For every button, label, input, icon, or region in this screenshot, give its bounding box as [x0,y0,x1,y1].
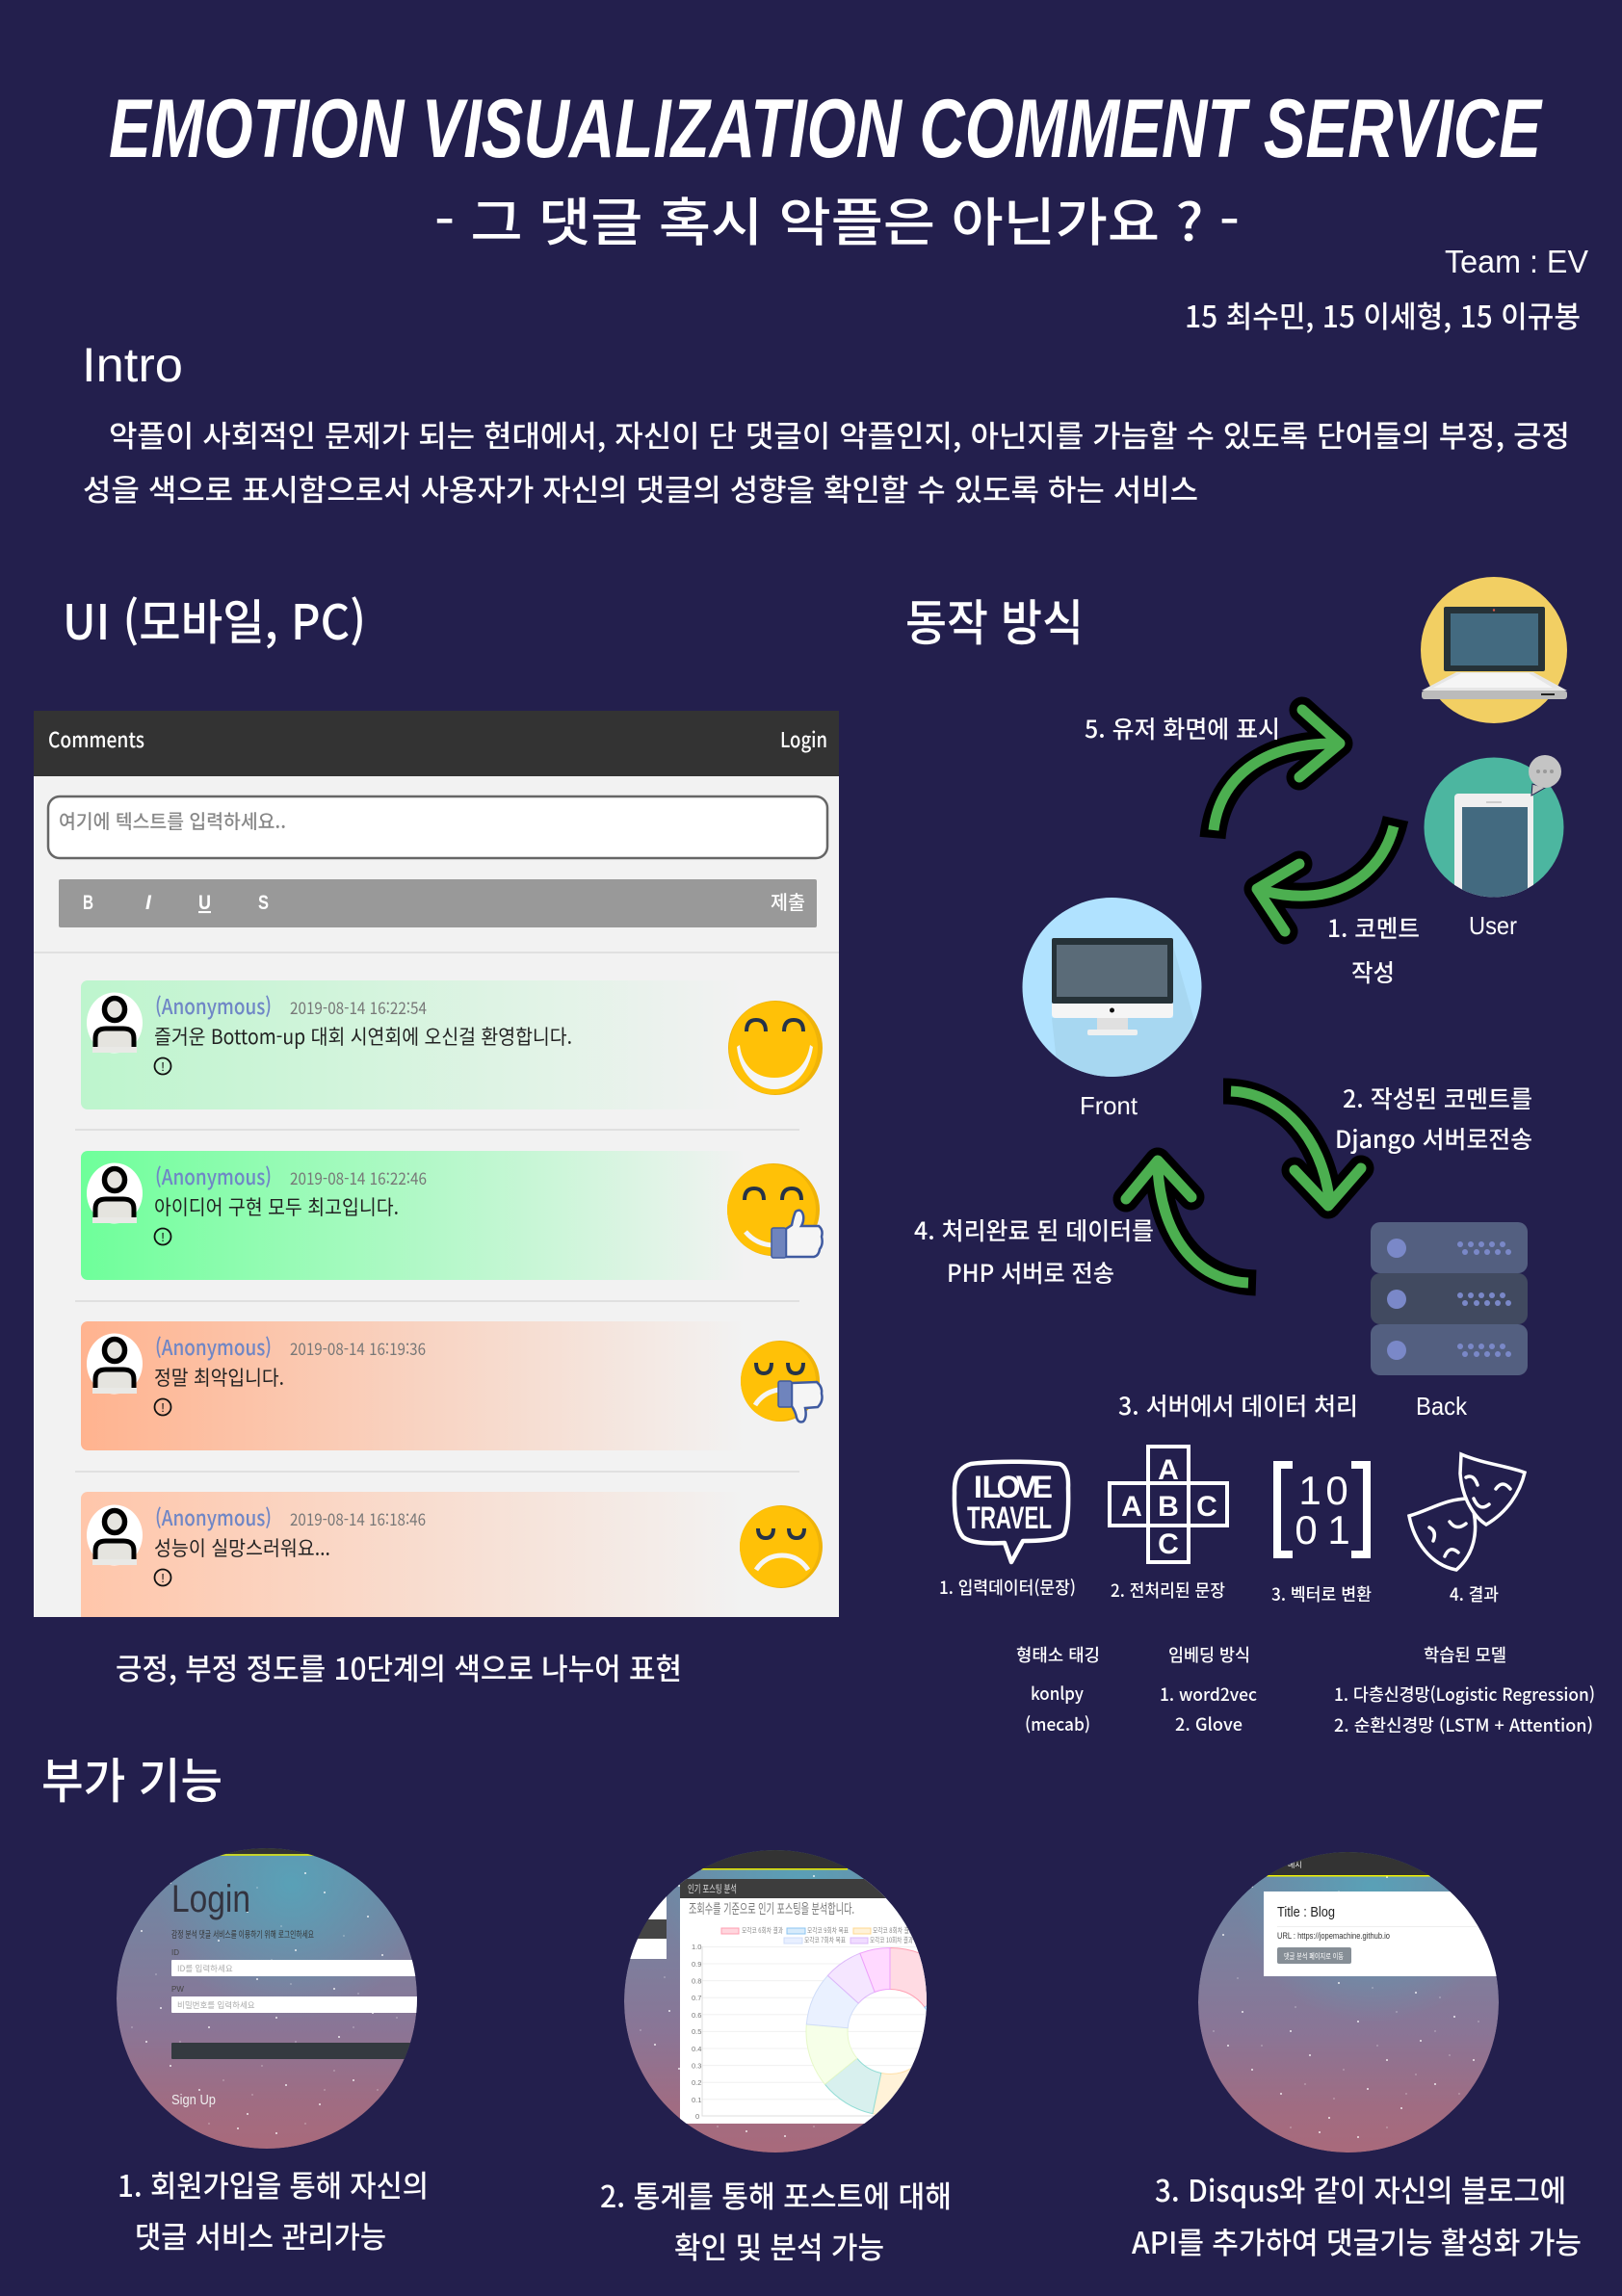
tech column: embedding: 1. word2vec [1160,1682,1257,1707]
intro paragraph: 악플이 사회적인 문제가 되는 현대에서, 자신이 단 댓글이 악플인지, 아닌지를 가늠할 수 있도록 단어들의 부정, 긍정 [109,412,1570,456]
pipeline label 3: 3. 벡터로 변환 [1271,1581,1372,1606]
feature caption 3 [1132,2167,1582,2262]
circle screenshot: login: 비밀번호를 입력하세요 [177,1999,255,2011]
emoji: thumbs up [727,1163,823,1258]
pipeline icon: binary matrix: 1 [1327,1507,1350,1552]
team name: Team : EV [1445,244,1588,279]
avatar [87,992,143,1054]
pipeline icon: letter cross [1110,1447,1227,1562]
comment card 1: 2019-08-14 16:22:54 [290,995,427,1019]
pipeline icon: binary matrix: 1 [1298,1468,1321,1513]
intro heading: Intro [82,338,183,392]
feature caption 2: 2. 통계를 통해 포스트에 대해 [600,2173,952,2216]
circle screenshot: blog API: 댓글 분석 페이지로 이동 [1284,1951,1344,1962]
feature caption 3: 3. Disqus와 같이 자신의 블로그에 [1155,2167,1566,2210]
comment input box [48,796,827,858]
intro paragraph [83,412,1570,509]
circle screenshot: login: ID를 입력하세요 [177,1963,233,1974]
label: User: User [1469,911,1517,940]
step label 2 [1335,1081,1532,1156]
comment card 4: (Anonymous) [155,1501,272,1532]
intro paragraph: 성을 색으로 표시함으로서 사용자가 자신의 댓글의 성향을 확인할 수 있도록 하는 서비스 [83,466,1198,509]
arrow: user to front [1257,819,1396,931]
feature caption 2: 확인 및 분석 가능 [674,2224,884,2267]
report icon [154,1229,171,1244]
label: Back: Back [1416,1392,1468,1421]
circle screenshot: login: 감정 분석 댓글 서비스를 이용하기 위해 로그인하세요 [171,1927,314,1941]
icon: desktop monitor [1023,898,1214,1088]
chart axis and grid: 0.7 [692,1994,701,2002]
icon: laptop [1421,577,1567,723]
comment card 3: 정말 최악입니다. [154,1363,284,1392]
circle screenshot: login: ID [171,1948,179,1957]
chart legend: 모각코 9회차 목표 [807,1925,849,1936]
arrow: back to front [1126,1161,1256,1283]
circle screenshot: blog API: URL : https://jopemachine.github.io [1277,1931,1390,1942]
step label 4: 4. 처리완료 된 데이터를 [914,1213,1154,1247]
step label 1 [1327,910,1420,989]
chart axis and grid [692,1943,930,2121]
circle screenshot: login: PW [171,1985,184,1994]
report icon: ! [161,1400,165,1415]
donut chart [806,1947,974,2116]
feature caption 1: 댓글 서비스 관리가능 [135,2213,386,2257]
circle screenshot: statistics: 조회수를 기준으로 인기 포스팅을 분석합니다. [689,1899,854,1918]
emoji: sad [740,1505,823,1588]
pipeline icon: speech bubble sentence: I LOVE [974,1470,1053,1504]
icon: smartphone with speech bubble [1424,755,1564,909]
step label 2: Django 서버로전송 [1335,1121,1532,1156]
UI header bar: Comments [48,723,144,754]
team members: 15 최수민, 15 이세형, 15 이규봉 [1185,293,1581,336]
comment card 1: (Anonymous) [155,990,272,1021]
circle screenshot: login [117,1844,422,2149]
step label 1: 작성 [1351,954,1395,989]
comment card 3: (Anonymous) [155,1331,272,1362]
comment card 2: 2019-08-14 16:22:46 [290,1165,427,1189]
label: Front: Front [1080,1091,1138,1120]
panel: comment UI screenshot [34,711,839,1627]
chart axis and grid: 0.9 [692,1960,701,1969]
pipeline label 2: 2. 전처리된 문장 [1111,1578,1225,1603]
chart axis and grid: 0.6 [692,2011,701,2020]
how-it-works heading: 동작 방식 [905,584,1084,655]
chart axis and grid: 0 [695,2112,699,2121]
pipeline label 4: 4. 결과 [1450,1581,1499,1606]
report icon: ! [161,1230,165,1244]
formatting toolbar: B [83,892,93,914]
pipeline icon: letter cross: A [1121,1491,1142,1523]
formatting toolbar: S [258,892,269,914]
emoji: thumbs down [741,1341,823,1422]
feature caption 2 [600,2173,952,2267]
UI heading: UI (모바일, PC) [63,585,366,654]
pipeline icon: binary matrix [1277,1465,1367,1554]
tech column: morpheme tagging: (mecab) [1025,1711,1090,1736]
circle screenshot: blog API: 메시 [1288,1860,1302,1870]
chart legend: 모각코 6회차 결과 [742,1925,783,1936]
comment card 1: 즐거운 Bottom-up 대회 시연회에 오신걸 환영합니다. [154,1022,572,1051]
avatar [87,1163,143,1223]
chart axis and grid: 0.2 [692,2078,701,2087]
comment card 4: 2019-08-14 16:18:46 [290,1506,426,1530]
report icon [154,1057,171,1075]
report icon: ! [161,1059,165,1074]
chart legend: 모각코 7회차 목표 [804,1935,846,1945]
comment card 4: 성능이 실망스러워요... [154,1533,330,1562]
chart axis and grid: 0.8 [692,1976,701,1986]
tech column: morpheme tagging: konlpy [1031,1681,1084,1706]
chart legend [721,1925,914,1945]
tech column: morpheme tagging: 형태소 태깅 [1016,1642,1100,1667]
arrow: front to user display [1213,710,1340,838]
step label 1: 1. 코멘트 [1327,910,1420,945]
step label 2: 2. 작성된 코멘트를 [1343,1081,1532,1115]
circle screenshot: login: Login [171,1878,250,1920]
report icon [154,1398,171,1416]
tech column: embedding: 2. Glove [1175,1711,1243,1736]
chart axis and grid: 0.5 [692,2027,701,2036]
comment card 2: 아이디어 구현 모두 최고입니다. [154,1192,399,1221]
UI header bar: Login [780,723,827,754]
UI caption: 긍정, 부정 정도를 10단계의 색으로 나누어 표현 [116,1645,682,1688]
step label 4: PHP 서버로 전송 [947,1255,1114,1290]
pipeline icon: theatre masks [1409,1454,1525,1570]
chart axis and grid: 1.0 [692,1943,701,1951]
formatting toolbar: 제출 [771,887,805,915]
feature caption 1: 1. 회원가입을 통해 자신의 [118,2162,429,2205]
pipeline icon: letter cross: B [1158,1491,1179,1523]
report icon: ! [161,1571,165,1585]
chart legend: 모각코 8회차 결과 [873,1925,914,1936]
arrow: front to back [1223,1091,1361,1206]
tech column: trained models: 학습된 모델 [1424,1642,1506,1667]
circle screenshot: statistics: 인기 포스팅 분석 [688,1881,737,1896]
chart legend: 모각코 10회차 결과 [870,1935,913,1945]
chart axis and grid: 0.4 [692,2045,701,2053]
icon: server rack [1371,1222,1528,1375]
step label 5: 5. 유저 화면에 표시 [1085,711,1280,745]
report icon [154,1570,171,1585]
pipeline icon: binary matrix: 0 [1295,1507,1318,1552]
tech column: trained models: 1. 다층신경망(Logistic Regression) [1334,1682,1595,1707]
step label 3: 3. 서버에서 데이터 처리 [1118,1388,1358,1422]
pipeline icon: speech bubble sentence [955,1462,1068,1562]
step label 4 [914,1213,1154,1290]
comment input box: 여기에 텍스트를 입력하세요.. [59,806,286,834]
formatting toolbar [59,879,817,927]
pipeline icon: binary matrix: 0 [1325,1468,1348,1513]
chart axis and grid: 0.1 [692,2096,701,2104]
comment card 2 [81,1151,823,1280]
tech column: embedding [1160,1642,1257,1736]
avatar [87,1504,143,1566]
tech column: trained models: 2. 순환신경망 (LSTM + Attention) [1334,1712,1593,1737]
emoji: big smile [728,1001,823,1095]
formatting toolbar: U [198,892,211,914]
comment card 3 [81,1321,823,1450]
circle screenshot: blog API: Title : Blog [1277,1904,1335,1920]
tech column: morpheme tagging [1016,1642,1100,1736]
circle screenshot: login: Sign Up [171,2093,216,2108]
avatar [87,1333,143,1395]
pipeline icon: letter cross: A [1158,1454,1179,1486]
pipeline icon: letter cross: C [1196,1491,1217,1523]
pipeline label 1: 1. 입력데이터(문장) [939,1575,1076,1600]
formatting toolbar: I [145,892,152,914]
tech column: embedding: 임베딩 방식 [1168,1642,1250,1667]
pipeline icon: letter cross: C [1158,1528,1179,1560]
tech column: trained models [1334,1642,1595,1737]
comment card 4 [81,1492,823,1627]
pipeline icon: speech bubble sentence: TRAVEL [967,1500,1052,1535]
comment card 3: 2019-08-14 16:19:36 [290,1336,426,1360]
UI header bar [34,711,839,776]
subtitle: - 그 댓글 혹시 악플은 아닌가요 ? - [434,180,1240,256]
circle screenshot: statistics [616,1849,974,2152]
comment card 2: (Anonymous) [155,1161,272,1191]
extra features heading: 부가 기능 [41,1743,222,1813]
feature caption 3: API를 추가하여 댓글기능 활성화 가능 [1132,2219,1582,2262]
comment card 1 [81,980,823,1109]
chart axis and grid: 0.3 [692,2061,701,2071]
feature caption 1 [118,2162,429,2257]
circle screenshot: blog API [1198,1849,1504,2152]
